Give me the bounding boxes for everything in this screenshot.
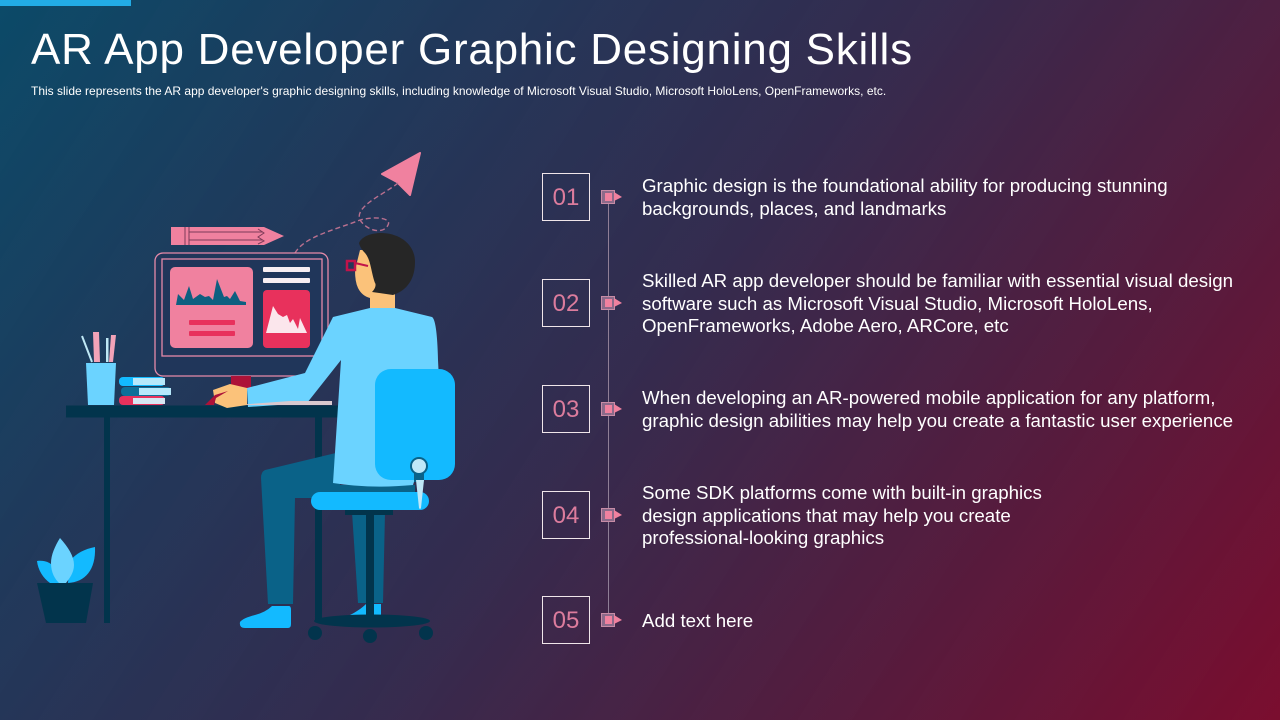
- accent bar: [0, 0, 131, 6]
- marker 2: [602, 296, 622, 310]
- icon: paper plane: [382, 153, 420, 195]
- marker 1: [602, 190, 622, 204]
- item 2 text: OpenFrameworks, Adobe Aero, ARCore, etc: [642, 315, 1009, 336]
- title: AR App Developer Graphic Designing Skills: [31, 25, 913, 74]
- pencil cup: [82, 332, 116, 405]
- item 1 text: [642, 175, 1168, 219]
- near leg: [261, 452, 415, 604]
- number 02: 02: [553, 290, 579, 317]
- marker 5: [602, 614, 622, 626]
- far shoe: [350, 604, 381, 615]
- subtitle: This slide represents the AR app developer's graphic designing skills, including knowledge of Microsoft Visual Studio, Microsoft HoloLens, OpenFrameworks, etc.: [31, 84, 886, 98]
- number 01: [542, 173, 590, 221]
- paper: [236, 401, 332, 405]
- number 05: [542, 596, 590, 644]
- person: [205, 233, 440, 628]
- icon: pencil: [171, 227, 284, 245]
- number 01: 01: [553, 184, 579, 211]
- number 04: 04: [553, 502, 579, 529]
- dashed flight path: [295, 183, 398, 253]
- marker 4: [602, 508, 622, 522]
- glasses: [347, 261, 368, 270]
- number 04: [542, 491, 590, 539]
- number 05: 05: [553, 607, 579, 634]
- neck: [370, 285, 395, 312]
- number 02: [542, 279, 590, 327]
- timeline: [602, 190, 622, 626]
- face: [355, 250, 380, 298]
- item 2 text: Skilled AR app developer should be familiar with essential visual design: [642, 270, 1233, 291]
- item 1 text: Graphic design is the foundational ability for producing stunning: [642, 175, 1168, 196]
- hand: [213, 384, 247, 408]
- mouse: [205, 391, 228, 405]
- item 4 text: professional-looking graphics: [642, 527, 884, 548]
- item 2 text: software such as Microsoft Visual Studio, Microsoft HoloLens,: [642, 292, 1153, 314]
- item 4 text: [642, 482, 1042, 548]
- number 03: 03: [553, 396, 579, 423]
- shirt and arm: [247, 308, 440, 487]
- books: [119, 377, 171, 405]
- monitor: [155, 253, 328, 391]
- hair: [359, 233, 415, 295]
- number 03: [542, 385, 590, 433]
- near shoe: [240, 606, 291, 628]
- item 4 text: Some SDK platforms come with built-in graphics: [642, 482, 1042, 503]
- chair: [308, 369, 455, 643]
- item 1 text: backgrounds, places, and landmarks: [642, 198, 946, 218]
- far leg: [352, 512, 385, 603]
- desk: [66, 406, 342, 623]
- item 3 text: When developing an AR-powered mobile application for any platform,: [642, 387, 1215, 408]
- item 2 text: [642, 270, 1233, 336]
- item 4 text: design applications that may help you create: [642, 504, 1011, 526]
- plant: [37, 538, 95, 623]
- marker 3: [602, 402, 622, 416]
- item 3 text: [642, 387, 1233, 431]
- item 5 text: Add text here: [642, 610, 753, 631]
- item 3 text: graphic design abilities may help you create a fantastic user experience: [642, 410, 1233, 430]
